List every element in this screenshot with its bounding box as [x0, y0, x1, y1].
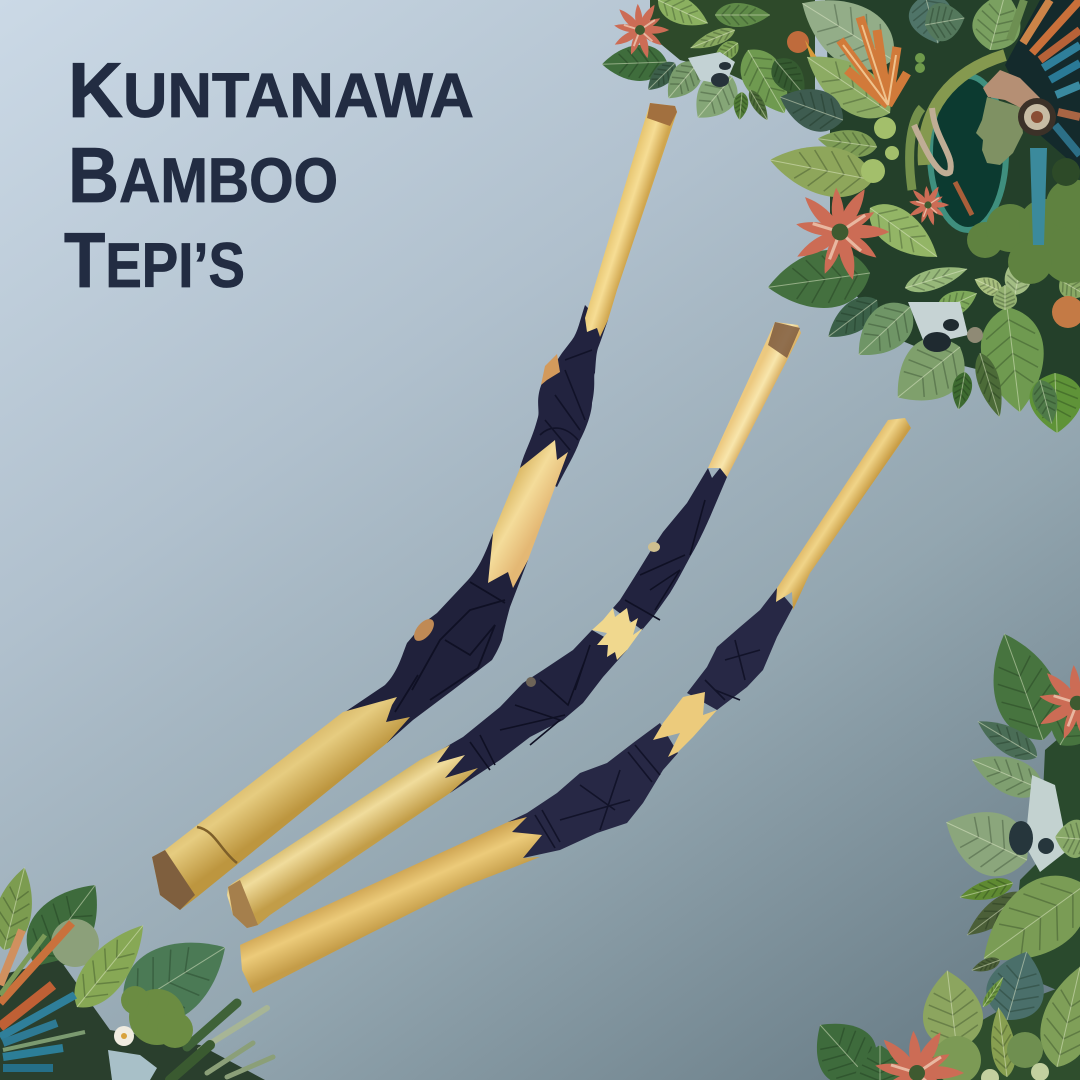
middle bamboo segment — [488, 440, 568, 588]
knot upper — [541, 354, 560, 385]
carved lines lower — [535, 745, 660, 848]
pendant — [1030, 148, 1047, 245]
foliage: top right cluster with headdress figure — [601, 0, 1080, 434]
arch with moss rim — [910, 55, 1006, 230]
coral flower — [794, 186, 889, 281]
carved lines — [625, 500, 705, 620]
upper dark wrap — [687, 588, 793, 710]
bamboo tepi 2 (middle) — [227, 322, 801, 928]
yellow zigzag band — [592, 608, 643, 660]
white flower — [114, 1026, 134, 1046]
large outer leaves — [764, 0, 1080, 434]
river patch — [688, 52, 735, 85]
ear disc — [1018, 98, 1056, 136]
foliage: bottom left cluster — [0, 863, 273, 1080]
river — [108, 1050, 157, 1080]
bead — [648, 542, 660, 552]
top bamboo segment — [708, 322, 801, 477]
lower bamboo segment — [152, 697, 410, 910]
carved lines lower — [470, 645, 590, 770]
upper dark wrap — [520, 305, 608, 487]
lower dark wrap — [432, 630, 627, 793]
carved lines — [705, 640, 760, 700]
burnt top end — [647, 103, 677, 126]
moss mass — [967, 158, 1080, 284]
moss — [121, 986, 193, 1048]
yellow zigzag band — [653, 692, 717, 757]
knot — [526, 677, 536, 687]
lower dark wrap — [345, 533, 528, 743]
headband — [983, 70, 1040, 110]
title: BAMBOO — [68, 131, 338, 219]
carved lines lower — [395, 582, 505, 712]
lower dark wrap — [508, 723, 678, 858]
lower bamboo segment — [240, 817, 542, 993]
waterfall and rocks — [1009, 775, 1068, 872]
top strip of leaves — [601, 0, 820, 130]
bright centre leaf — [859, 193, 948, 272]
cut end and node — [152, 827, 237, 910]
small coral flower — [908, 185, 949, 226]
green fruits — [861, 53, 925, 183]
carved lines upper — [540, 350, 592, 450]
orange bird-of-paradise flower — [840, 17, 907, 105]
orange round flower — [787, 31, 809, 53]
cut end — [228, 880, 258, 928]
bamboo tepi 3 (right) — [240, 418, 911, 993]
bamboo tepi 1 (left) — [152, 103, 677, 910]
upper dark wrap — [613, 468, 727, 630]
hook ornament — [914, 108, 972, 215]
feathers — [0, 923, 85, 1068]
dark mass behind main cluster — [825, 0, 1080, 395]
title: TEPI’S — [64, 216, 245, 304]
orange round flower — [1052, 296, 1080, 328]
foliage: bottom right cluster — [798, 944, 1080, 1080]
upper bamboo segment — [585, 103, 677, 337]
feather headdress — [1005, 0, 1080, 170]
burnt top end — [768, 322, 800, 358]
river and rocks — [908, 302, 983, 352]
face profile — [976, 97, 1023, 165]
top bamboo segment — [776, 418, 911, 610]
knot lower — [410, 616, 438, 644]
title — [64, 46, 474, 304]
spiky leaves — [170, 1003, 273, 1080]
title: KUNTANAWA — [68, 46, 474, 134]
foliage: right side cluster — [933, 623, 1080, 1000]
lower bamboo segment — [227, 745, 478, 928]
